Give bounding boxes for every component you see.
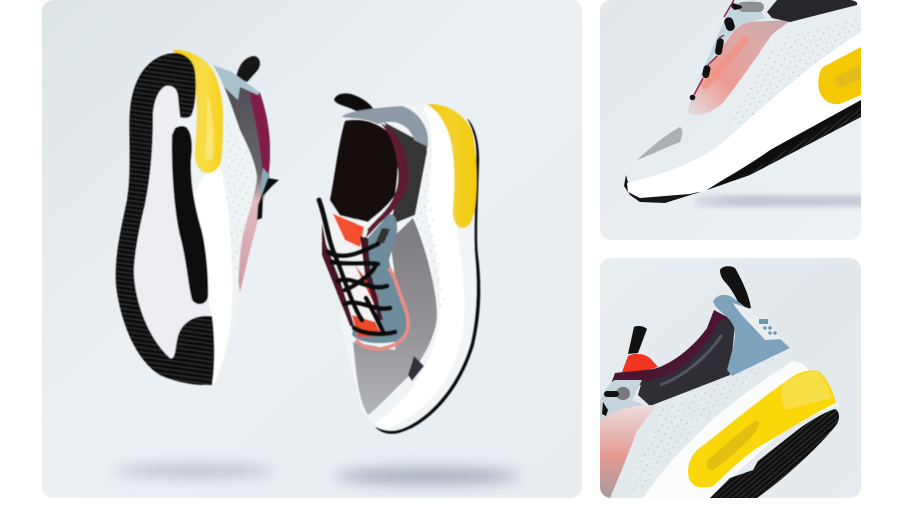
pale blue lining [600, 380, 645, 420]
panel: two floating sneakers [42, 0, 582, 498]
white midsole [643, 361, 838, 498]
sneaker: side view [319, 93, 480, 434]
blue collar [213, 65, 259, 100]
tongue [330, 215, 382, 335]
swoosh window [637, 127, 682, 160]
pink mesh [600, 405, 657, 498]
floor shadows [115, 465, 519, 484]
air unit highlight [781, 372, 832, 410]
maroon eyestay [360, 236, 383, 320]
white midsole [627, 32, 861, 198]
pale dotted panel [610, 348, 793, 498]
yellow air unit [818, 47, 861, 104]
maroon collar [611, 310, 733, 385]
coral glow [356, 268, 408, 349]
midsole [130, 50, 257, 387]
dark heel mesh [384, 122, 427, 225]
sneaker: sole view [116, 50, 279, 387]
collar top [342, 106, 428, 147]
panel: heel close-up [600, 258, 861, 498]
yellow air unit [688, 370, 836, 487]
laces [319, 200, 395, 334]
blue lining [696, 0, 765, 85]
pink mesh [687, 20, 792, 115]
maroon lining [249, 92, 270, 176]
collar opening [330, 120, 398, 222]
eyelet and laces [690, 0, 764, 100]
black outsole [707, 100, 861, 190]
maroon trim [360, 123, 409, 240]
air unit [172, 50, 223, 173]
laces [257, 178, 279, 220]
black sole [710, 409, 839, 498]
white sole waffle [134, 86, 212, 358]
blue collar [713, 295, 790, 376]
yellow air unit [427, 104, 477, 228]
white heel tab [733, 303, 783, 340]
black sole edge [375, 118, 480, 434]
translucent toe and upper [637, 0, 792, 165]
upper [224, 86, 270, 292]
center outsole pad [171, 126, 208, 304]
blue eyestay [352, 214, 409, 343]
dark mesh [767, 0, 857, 22]
dark mesh [638, 318, 735, 406]
floor shadow [695, 195, 865, 207]
midsole [340, 104, 480, 433]
pale dotted panel [722, 28, 782, 104]
heel pull tab [720, 266, 751, 310]
gray mesh vamp [353, 218, 437, 415]
black outsole [116, 53, 214, 385]
air unit inner chamber [707, 421, 759, 470]
red tongue [622, 354, 658, 372]
heel pull tab [334, 93, 374, 111]
panel: toe close-up [600, 0, 865, 240]
toe pull tab [628, 326, 647, 354]
eyelet and lace [602, 387, 630, 416]
heel pull tab [236, 56, 260, 82]
swoosh tag [408, 356, 424, 381]
